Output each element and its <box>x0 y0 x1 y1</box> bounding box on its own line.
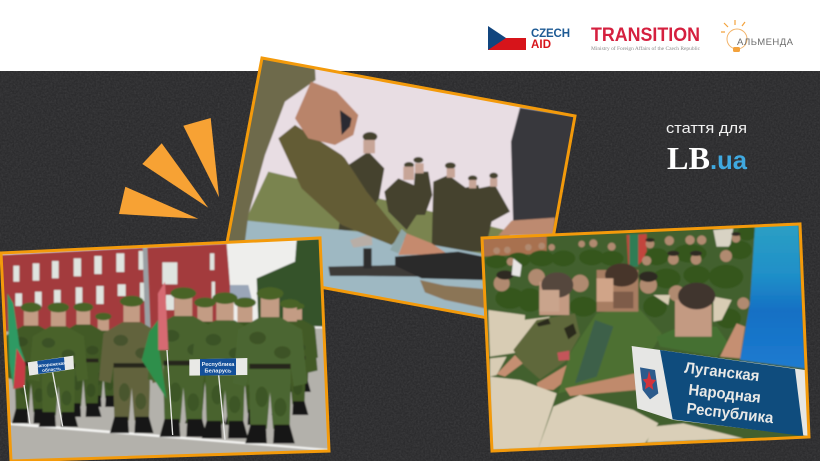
text: article for LB.ua: .ua <box>710 145 748 175</box>
logo: Almenda <box>721 20 794 52</box>
distant soldiers <box>338 132 510 252</box>
person centre <box>558 263 662 396</box>
front seats <box>490 377 743 450</box>
logo: Czech Aid: AID <box>531 39 551 51</box>
sign poles <box>24 350 225 440</box>
sign: Republic of Belarus <box>189 358 247 376</box>
sign: Zaporizhzhia region <box>28 356 74 376</box>
dark hair <box>496 232 741 282</box>
sign: Republic of Belarus: Беларусь <box>205 369 232 375</box>
icon: orange burst rays <box>119 118 219 219</box>
panel: photo of Belarus parade formation <box>0 235 335 461</box>
sign: Luhansk People's Republic: Народная <box>688 382 762 407</box>
person right <box>657 283 745 358</box>
text: article for LB.ua <box>666 120 748 176</box>
sign: Republic of Belarus: Республика <box>202 361 235 368</box>
sign: Luhansk People's Republic: Республика <box>686 400 775 427</box>
text: article for LB.ua: стаття для <box>666 120 747 137</box>
soldiers <box>2 287 318 443</box>
sign: Luhansk People's Republic <box>632 346 808 436</box>
logo: Czech Aid <box>488 26 570 51</box>
panel: photo of weapons training <box>226 56 577 319</box>
sign: Zaporizhzhia region: область <box>42 365 61 373</box>
icon: red star shield <box>640 367 658 399</box>
text: article for LB.ua: LB <box>667 140 710 176</box>
panel: photo of seated delegates <box>480 223 813 457</box>
logo: Czech Aid: CZECH <box>531 28 570 40</box>
audience <box>485 226 756 328</box>
sign: Zaporizhzhia region: Запорожская <box>36 360 66 369</box>
building windows <box>13 251 215 310</box>
logo: Transition: Ministry of Foreign Affairs of the Czech Republic <box>591 45 701 52</box>
logo: Almenda: АЛЬМЕНДА <box>737 37 794 48</box>
person left <box>497 272 580 390</box>
logo: Transition: TRANSITION <box>591 24 700 46</box>
sign: Luhansk People's Republic: Луганская <box>684 360 760 385</box>
header background <box>0 0 820 71</box>
